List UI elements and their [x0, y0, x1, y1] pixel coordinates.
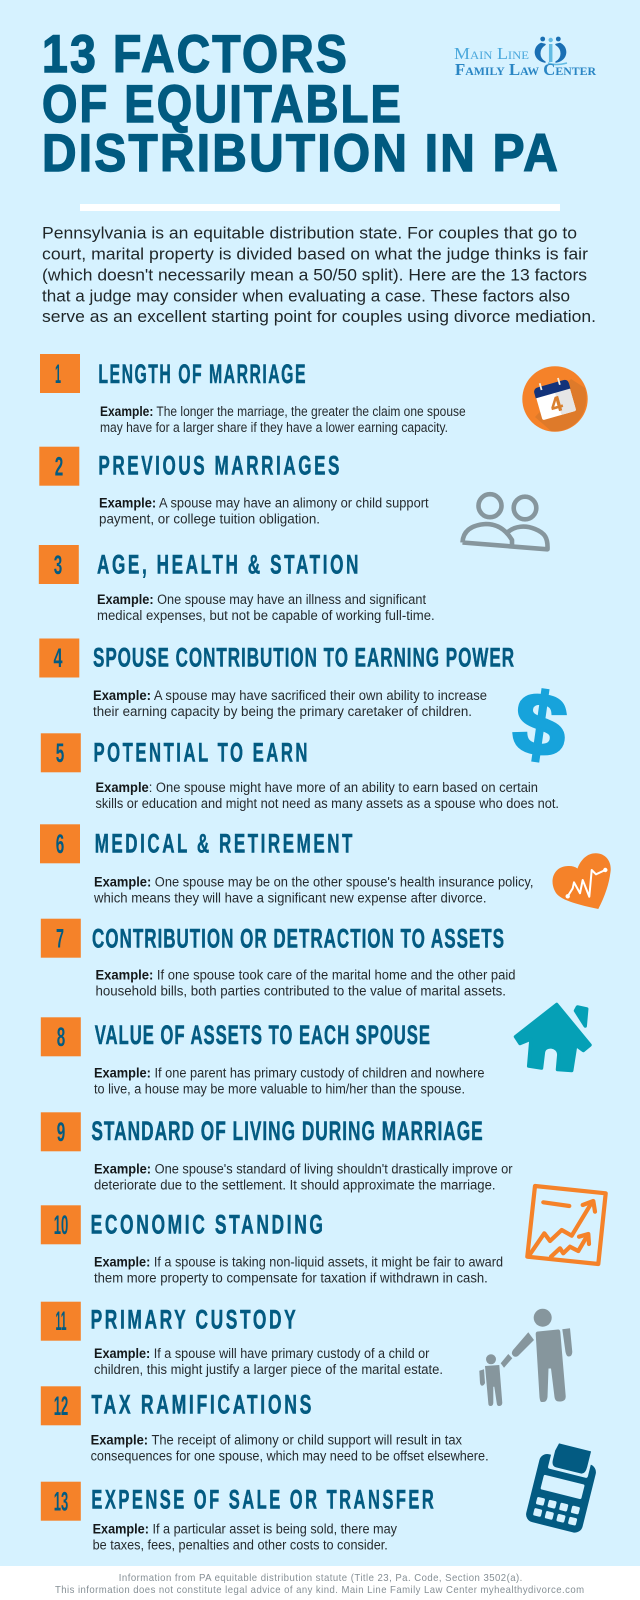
factor 9: deteriorate due to the settlement. It should approximate the marriage. [94, 1177, 496, 1192]
factor 5: 5 [56, 738, 64, 768]
factor 12: TAX RAMIFICATIONS [91, 1390, 314, 1420]
factor 5 [41, 733, 559, 811]
factor 13: EXPENSE OF SALE OR TRANSFER [91, 1484, 436, 1514]
factor 8: to live, a house may be more valuable to him/her than the spouse. [94, 1081, 465, 1096]
factor 12 [41, 1386, 489, 1463]
factor 12: consequences for one spouse, which may need to be offset elsewhere. [91, 1448, 489, 1463]
intro paragraph: (which doesn't necessarily mean a 50/50 split). Here are the 13 factors [42, 265, 587, 284]
factor 6: Example: One spouse may be on the other spouse's health insurance policy, [94, 875, 534, 890]
footer [0, 1566, 640, 1600]
intro paragraph [42, 224, 596, 326]
factor 11: PRIMARY CUSTODY [91, 1304, 298, 1334]
factor 9: Example: One spouse's standard of living shouldn't drastically improve or [94, 1161, 513, 1176]
icon: parent and child [479, 1309, 572, 1406]
intro paragraph: Pennsylvania is an equitable distribution state. For couples that go to [42, 224, 577, 243]
factor 4 [39, 638, 515, 719]
factor 13 [41, 1482, 436, 1552]
title: DISTRIBUTION IN PA [42, 124, 560, 183]
factor 5: Example: One spouse might have more of an ability to earn based on certain [96, 780, 538, 795]
factor 3: 3 [54, 550, 62, 580]
factor 3: Example: One spouse may have an illness and significant [97, 592, 426, 607]
factor 8: Example: If one parent has primary custody of children and nowhere [94, 1065, 484, 1080]
factor 10: them more property to compensate for taxation if withdrawn in cash. [94, 1271, 488, 1286]
title: 13 FACTORS [42, 25, 349, 84]
factor 3 [39, 545, 435, 623]
icon: calendar [522, 366, 588, 432]
title [42, 25, 560, 183]
intro paragraph: court, marital property is divided based on what the judge thinks is fair [42, 245, 588, 264]
factor 5: POTENTIAL TO EARN [94, 737, 310, 767]
footer: This information does not constitute legal advice of any kind. Main Line Family Law Center myhealthydivorce.com [55, 1584, 584, 1596]
factor 13: Example: If a particular asset is being sold, there may [93, 1521, 397, 1536]
factor 2: Example: A spouse may have an alimony or child support [99, 495, 429, 510]
intro paragraph: serve as an excellent starting point for couples using divorce mediation. [42, 307, 596, 326]
factor 4: Example: A spouse may have sacrificed their own ability to increase [93, 688, 487, 703]
logo: Main Line Family Law Center [454, 37, 596, 79]
logo: Main Line Family Law Center: Family Law Center [455, 60, 596, 79]
icon: calculator [524, 1438, 601, 1534]
factor 1 [40, 354, 466, 435]
icon: rising chart [527, 1186, 606, 1264]
factor 4: 4 [54, 643, 63, 673]
factor 1: 1 [55, 359, 61, 389]
icon: two people [462, 494, 548, 549]
factor 6: which means they will have a significant new expense after divorce. [93, 891, 487, 906]
factor 13: be taxes, fees, penalties and other costs to consider. [93, 1537, 388, 1552]
factor 3: medical expenses, but not be capable of working full-time. [97, 608, 435, 623]
factor 3: AGE, HEALTH & STATION [97, 549, 361, 579]
intro paragraph: that a judge may consider when evaluating a case. These factors also [42, 286, 570, 305]
factor 9: 9 [57, 1117, 65, 1147]
factor 2: PREVIOUS MARRIAGES [98, 451, 342, 481]
factor 8: 8 [57, 1022, 65, 1052]
title: OF EQUITABLE [42, 75, 403, 134]
factor 11: 11 [56, 1306, 67, 1336]
factor 9 [41, 1112, 513, 1192]
factor 2 [39, 447, 429, 526]
factor 10: ECONOMIC STANDING [91, 1209, 326, 1239]
factor 11: children, this might justify a larger piece of the marital estate. [94, 1362, 443, 1377]
factor 12: 12 [54, 1391, 68, 1421]
factor 12: Example: The receipt of alimony or child support will result in tax [91, 1432, 462, 1447]
factor 13: 13 [54, 1486, 68, 1516]
factor 11 [41, 1302, 443, 1377]
footer: Information from PA equitable distribution statute (Title 23, Pa. Code, Section 3502(a). [119, 1572, 523, 1584]
factor 2: payment, or college tuition obligation. [99, 511, 320, 526]
factor 6: 6 [56, 829, 64, 859]
factor 10 [41, 1205, 503, 1286]
factor 4: their earning capacity by being the primary caretaker of children. [93, 704, 472, 719]
icon: dollar sign: $ [508, 673, 573, 777]
factor 7: Example: If one spouse took care of the marital home and the other paid [96, 967, 516, 982]
factor 7: household bills, both parties contributed to the value of marital assets. [96, 983, 506, 998]
factor 8 [41, 1017, 485, 1096]
factor 6 [40, 824, 534, 906]
factor 1: LENGTH OF MARRIAGE [98, 359, 307, 389]
factor 8: VALUE OF ASSETS TO EACH SPOUSE [95, 1020, 431, 1050]
factor 2: 2 [55, 452, 63, 482]
factor 1: Example: The longer the marriage, the greater the claim one spouse [100, 404, 466, 419]
factor 11: Example: If a spouse will have primary custody of a child or [94, 1346, 430, 1361]
factor 1: may have for a larger share if they have a lower earning capacity. [100, 420, 448, 435]
factor 10: Example: If a spouse is taking non-liquid assets, it might be fair to award [94, 1255, 503, 1270]
factor 10: 10 [54, 1210, 68, 1240]
icon: heart with pulse [553, 853, 611, 909]
factor 6: MEDICAL & RETIREMENT [95, 829, 355, 859]
logo: Main Line Family Law Center: Main Line [454, 44, 529, 63]
icon: house [516, 1004, 590, 1070]
factor 7 [41, 919, 516, 998]
factor 7: 7 [56, 924, 64, 954]
icon: calendar: 4 [548, 392, 566, 418]
factor 5: skills or education and might not need as many assets as a spouse who does not. [96, 796, 559, 811]
